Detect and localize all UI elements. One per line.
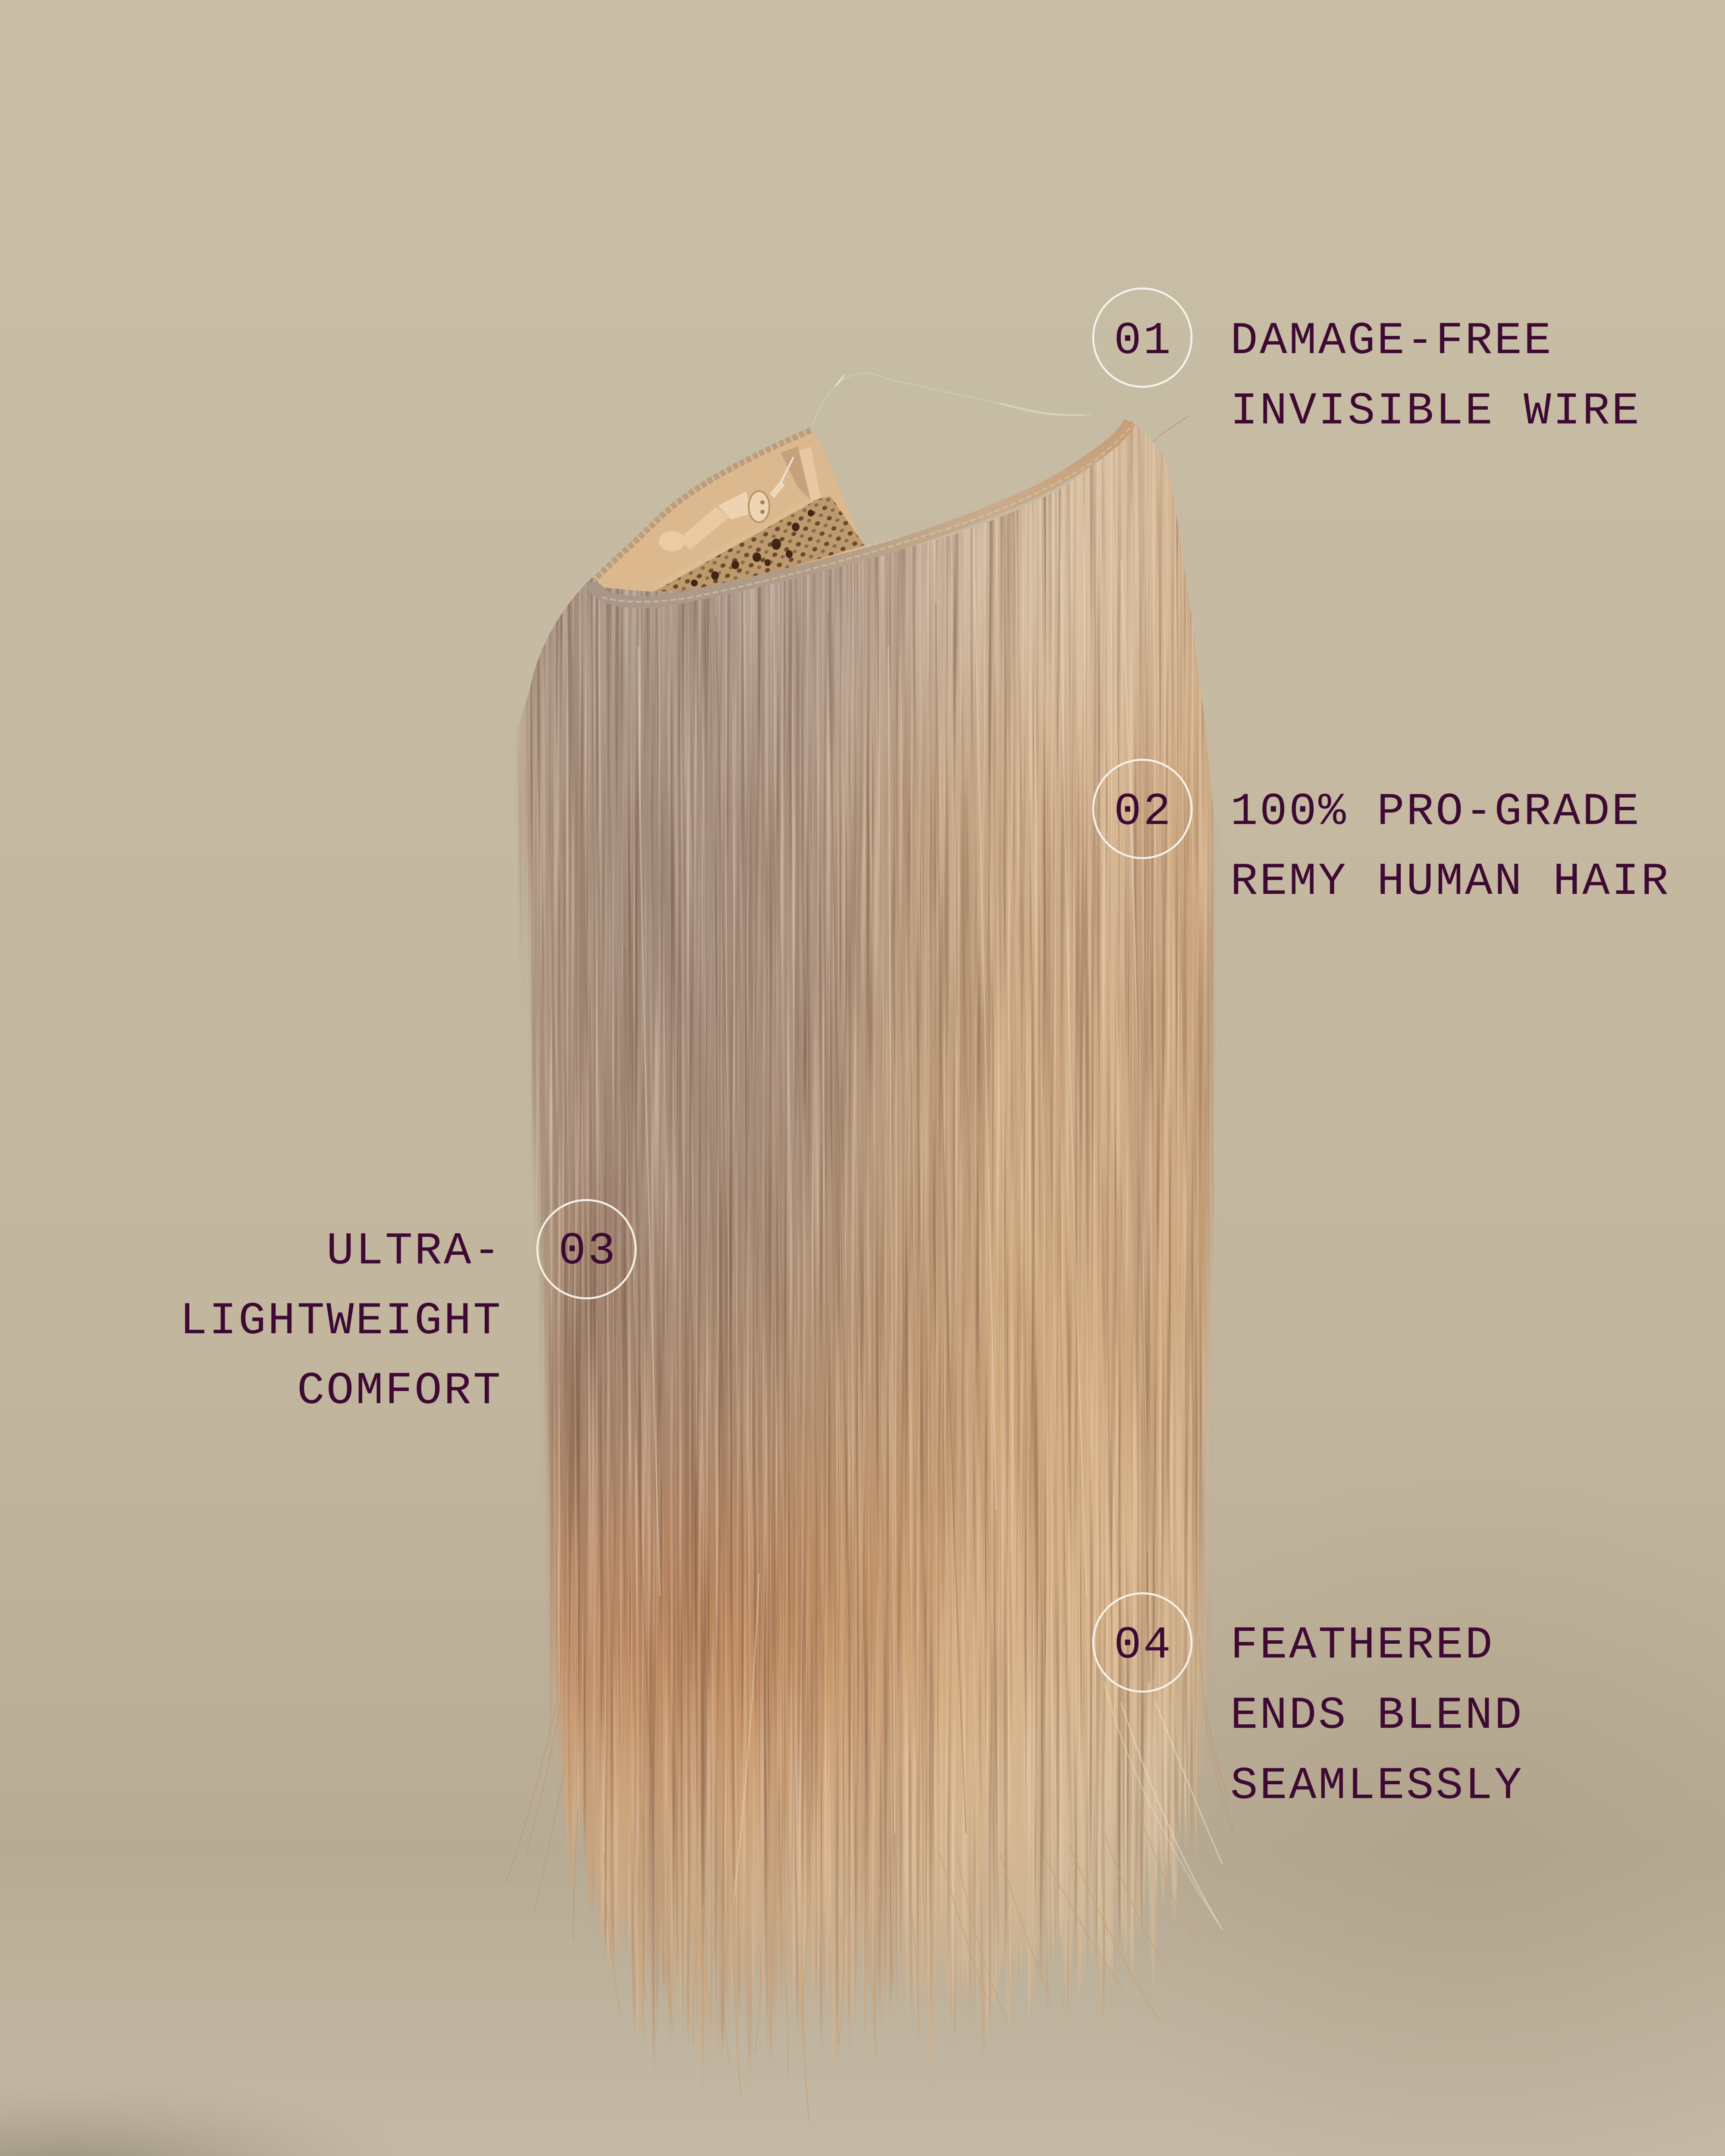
hair extension <box>505 287 1234 2121</box>
label 03: ULTRA- <box>326 1225 502 1277</box>
number badge 04: 04 <box>1114 1620 1173 1671</box>
lace fringe along top of band <box>867 425 1126 548</box>
number badge 01 <box>1093 288 1192 387</box>
callout 01: damage-free invisible wire <box>1093 288 1641 437</box>
strap and clasp <box>659 446 821 552</box>
invisible wire <box>812 373 1188 442</box>
label 04: FEATHERED <box>1230 1620 1494 1671</box>
label 04: ENDS BLEND <box>1230 1690 1524 1742</box>
number badge 03 <box>537 1200 636 1298</box>
number badge 01: 01 <box>1114 315 1173 367</box>
label 04: SEAMLESSLY <box>1230 1760 1524 1812</box>
hair weft band <box>592 422 1132 602</box>
feathered hair ends <box>506 1639 1233 2120</box>
hair strands body <box>518 420 1216 2078</box>
individual highlight strands <box>625 561 1218 1923</box>
label 03: COMFORT <box>297 1365 502 1417</box>
callout 04: feathered ends blend seamlessly <box>1093 1593 1524 1812</box>
number badge 02: 02 <box>1114 786 1173 838</box>
label 01: INVISIBLE WIRE <box>1230 385 1641 437</box>
label 03: LIGHTWEIGHT <box>180 1295 502 1347</box>
number badge 03: 03 <box>558 1225 617 1277</box>
lace panel <box>653 496 865 592</box>
callout 03: ultra-lightweight comfort <box>180 1200 636 1417</box>
callout 02: 100% pro-grade remy human hair <box>1093 760 1670 908</box>
number badge 04 <box>1093 1593 1192 1692</box>
label 02: REMY HUMAN HAIR <box>1230 856 1670 908</box>
inner cap panel <box>591 430 865 604</box>
number badge 02 <box>1093 760 1192 858</box>
label 01: DAMAGE-FREE <box>1230 315 1553 367</box>
label 02: 100% PRO-GRADE <box>1230 786 1641 838</box>
